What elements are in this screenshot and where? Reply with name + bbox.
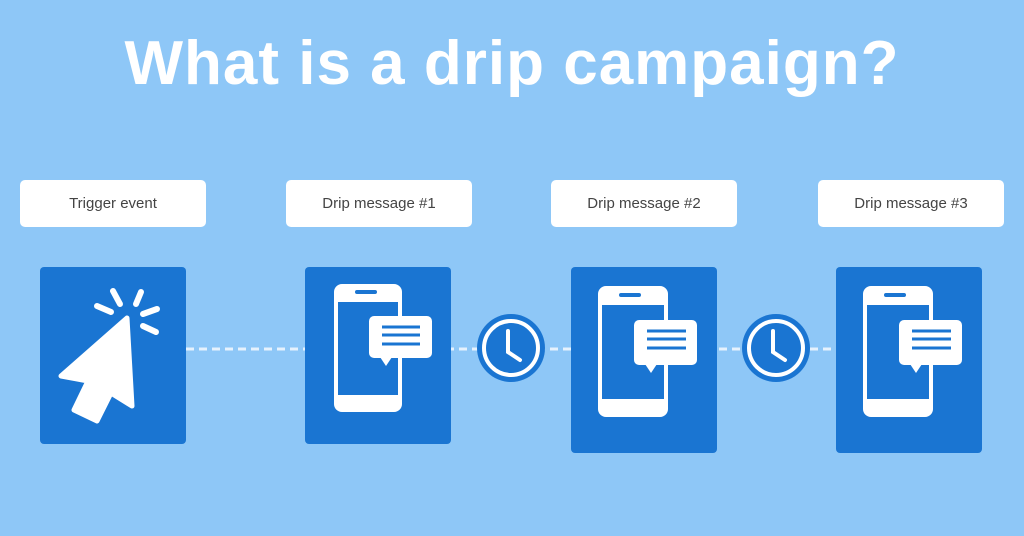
panel: message 2 (571, 267, 717, 453)
label: trigger event (20, 180, 206, 227)
icon: phone 1 (334, 284, 432, 412)
label: drip message 3 (818, 180, 1004, 227)
title: What is a drip campaign? (124, 29, 900, 98)
panel: trigger (40, 267, 186, 444)
label: trigger event: Trigger event (69, 195, 157, 212)
panel: message 1 (305, 267, 451, 444)
label: drip message 1: Drip message #1 (322, 195, 436, 212)
label: drip message 1 (286, 180, 472, 227)
icon: cursor click (61, 291, 157, 421)
panel: message 3 (836, 267, 982, 453)
label: drip message 2 (551, 180, 737, 227)
icon: phone 2 (598, 286, 697, 417)
label: drip message 3: Drip message #3 (854, 195, 968, 212)
label: drip message 2: Drip message #2 (587, 195, 701, 212)
icon: phone 3 (863, 286, 962, 417)
icon: clock 1 (477, 314, 545, 382)
icon: clock 2 (742, 314, 810, 382)
